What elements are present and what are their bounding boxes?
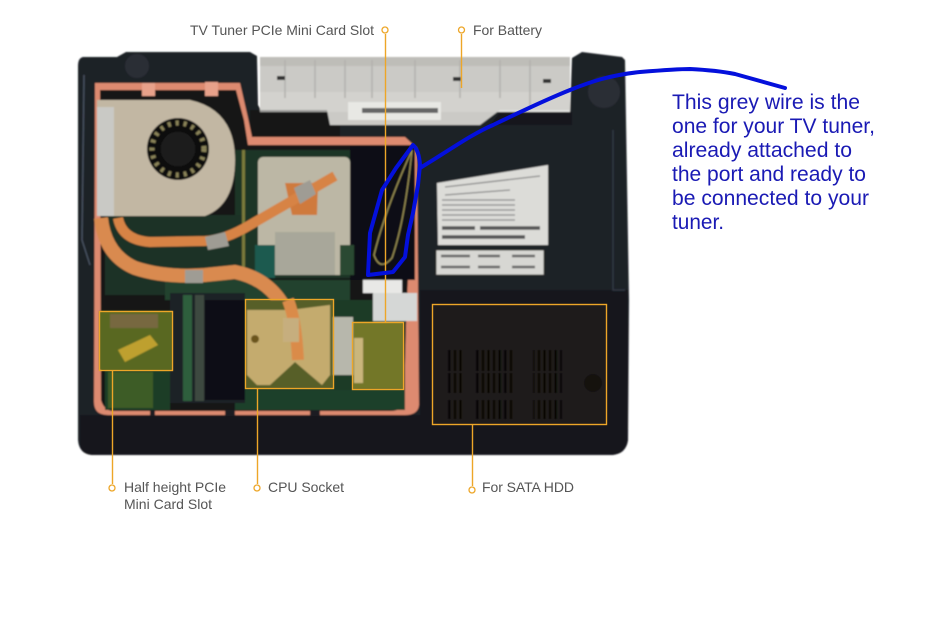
blue note text: one for your TV tuner, [672,115,875,138]
compliance label [436,250,544,275]
pipe tape [185,180,316,283]
leader dots [109,27,475,493]
fan [147,118,209,180]
memory slots [170,293,245,403]
motherboard green areas [105,145,415,410]
half height box [100,312,172,370]
speaker block [250,110,340,138]
TV tuner mini card shield [255,157,354,278]
component labels: Mini Card Slot [124,496,212,512]
component labels [124,22,574,512]
blue note text: the port and ready to [672,163,866,186]
CPU box [246,300,334,388]
blue note text [672,91,875,234]
component labels: For Battery [473,22,542,38]
white stickers [363,280,417,321]
component labels: Half height PCIe [124,479,226,495]
interior compartment [94,82,419,416]
laptop body [78,52,629,455]
half-height mini card [99,311,172,408]
component labels: TV Tuner PCIe Mini Card Slot [190,22,374,38]
laptop photo [78,52,629,455]
battery bay [260,57,570,125]
component labels: For SATA HDD [482,479,574,495]
HDD box [432,304,606,424]
blue note text: already attached to [672,139,852,162]
blue note text: be connected to your [672,187,869,210]
callout lines and boxes [100,27,606,493]
CPU heatsink [246,300,333,388]
battery bay lower dark latch [490,112,572,125]
internal wires [374,150,412,264]
lower body shading [80,290,628,455]
leader lines [112,34,472,486]
tuner card box [352,322,404,390]
specification label [437,165,548,245]
HDD vents [447,350,562,419]
heat pipes [101,176,335,362]
mini card slot right [333,317,403,389]
blue note text: This grey wire is the [672,91,860,114]
blue hand-drawn wire annotation [368,69,785,275]
fan heatsink plate [97,100,235,216]
blue note text: tuner. [672,211,724,234]
component labels: CPU Socket [268,479,344,495]
